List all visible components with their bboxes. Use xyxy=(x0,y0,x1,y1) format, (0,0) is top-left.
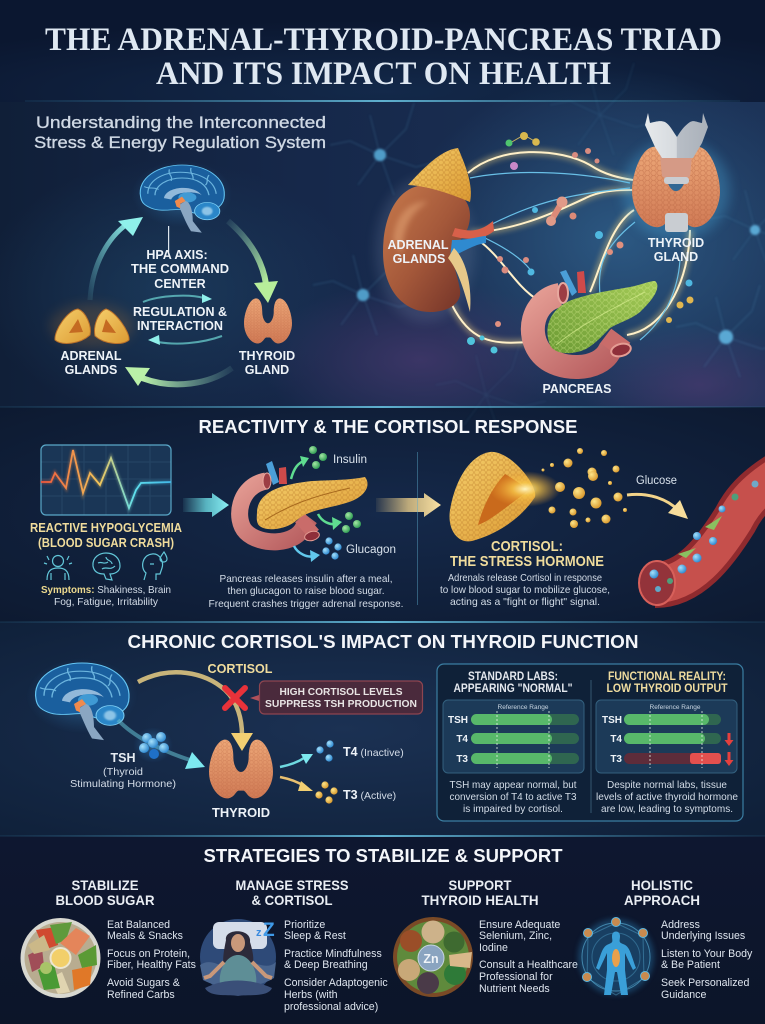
list: Seek Personalized xyxy=(661,977,749,989)
TSH molecule cluster xyxy=(133,727,173,763)
arrow: to pancreas xyxy=(183,493,229,517)
list: Meals & Snacks xyxy=(107,930,183,942)
label: thyroid gland: THYROID xyxy=(239,349,295,363)
list: Prioritize xyxy=(284,919,325,931)
label: thyroid gland: GLAND xyxy=(245,363,289,377)
note: standard labs xyxy=(450,780,577,815)
monitor chart xyxy=(41,445,171,515)
panel: standard labs: Reference Range xyxy=(498,704,549,711)
panel: pancreas hormones xyxy=(208,446,404,610)
icon: foggy brain xyxy=(93,553,120,580)
heading: functional reality xyxy=(606,671,728,695)
label: pancreas: PANCREAS xyxy=(542,382,612,396)
section 4 background xyxy=(0,836,765,1024)
list: Consider Adaptogenic xyxy=(284,977,388,989)
heading: chronic cortisol: CHRONIC CORTISOL'S IMPACT ON THYROID FUNCTION xyxy=(128,632,638,652)
cortisol arrow xyxy=(138,672,253,751)
heading: SUPPORT xyxy=(448,878,512,893)
diagram: cortisol suppression xyxy=(26,658,422,820)
subtitle: Understanding the Interconnected xyxy=(36,113,326,132)
title xyxy=(45,22,722,92)
panel: stabilize blood sugar xyxy=(20,878,196,1001)
small arrow top xyxy=(143,294,212,303)
heading: reactive hypoglycemia: REACTIVE HYPOGLYCEMIA xyxy=(30,521,182,535)
bar chart: functional reality xyxy=(602,711,734,768)
T3 molecules xyxy=(315,781,338,804)
pancreas xyxy=(533,270,657,367)
label: TSH: Stimulating Hormone) xyxy=(70,779,176,790)
heading xyxy=(624,878,700,908)
bar chart: standard labs: T3 xyxy=(456,754,468,765)
cortisol description xyxy=(440,573,610,608)
subtitle xyxy=(34,113,326,152)
list: Listen to Your Body xyxy=(661,948,753,960)
blood vessel xyxy=(639,468,765,605)
heading: standard labs: APPEARING "NORMAL" xyxy=(454,683,572,695)
panel: manage stress xyxy=(200,878,388,1013)
label: regulation and interaction: INTERACTION xyxy=(137,319,223,333)
section 2 background xyxy=(0,407,765,622)
pointer line xyxy=(168,226,169,252)
heading: standard labs: STANDARD LABS: xyxy=(468,671,558,683)
panel: reactive hypoglycemia xyxy=(30,445,182,608)
label: adrenal glands: GLANDS xyxy=(65,363,117,377)
label: thyroid: THYROID xyxy=(212,806,270,820)
list: Avoid Sugars & xyxy=(107,977,180,989)
list xyxy=(479,919,578,995)
lower green molecules xyxy=(318,512,361,533)
neuron network background xyxy=(313,63,765,435)
panel: functional reality: Reference Range xyxy=(650,704,701,711)
label: thyroid gland: THYROID xyxy=(648,236,704,250)
callout: suppress TSH: HIGH CORTISOL LEVELS xyxy=(280,686,402,698)
callout: suppress TSH: SUPPRESS TSH PRODUCTION xyxy=(265,698,417,710)
heading: THYROID HEALTH xyxy=(422,893,539,908)
list: & Deep Breathing xyxy=(284,959,368,971)
list: Address xyxy=(661,919,700,931)
label: adrenal glands: ADRENAL xyxy=(387,238,449,252)
list: Underlying Issues xyxy=(661,930,745,942)
list: Selenium, Zinc, xyxy=(479,930,552,942)
brain xyxy=(26,658,138,740)
label: TSH: TSH xyxy=(110,751,136,765)
list xyxy=(284,919,388,1013)
label: TSH: (Thyroid xyxy=(103,767,143,778)
small arrow bottom xyxy=(148,335,222,345)
icon: thyroid gland xyxy=(244,298,292,344)
heading xyxy=(56,878,155,908)
bar chart: standard labs: T4 xyxy=(456,734,468,745)
note: functional reality: levels of active thyroid hormone xyxy=(596,792,738,803)
label: thyroid gland: GLAND xyxy=(654,250,698,264)
list: Guidance xyxy=(661,989,706,1001)
arrow: adrenals to brain xyxy=(90,217,143,300)
label: T3: T3 (Active) xyxy=(343,788,396,802)
icon: tired head xyxy=(143,552,167,580)
arrow: to cortisol xyxy=(376,493,441,517)
list: Ensure Adequate xyxy=(479,919,560,931)
arrow: brain to thyroid xyxy=(228,221,278,303)
panel: holistic approach xyxy=(578,878,753,1001)
arrow: T3 xyxy=(280,777,313,791)
list: Fiber, Healthy Fats xyxy=(107,959,196,971)
list: Nutrient Needs xyxy=(479,983,550,995)
list xyxy=(107,919,196,1001)
pancreas description xyxy=(208,574,404,610)
label: insulin: Insulin xyxy=(333,454,367,466)
list: Professional for xyxy=(479,971,553,983)
heading: standard labs xyxy=(454,671,572,695)
pancreas description: then glucagon to raise blood sugar. xyxy=(228,586,384,597)
TSH arrow xyxy=(118,720,205,769)
list xyxy=(661,919,753,1001)
kidney xyxy=(375,178,494,322)
callout: suppress TSH xyxy=(250,681,422,714)
label: adrenal glands: ADRENAL xyxy=(60,349,122,363)
icon: meditating person: z xyxy=(256,927,262,939)
label: T4: T4 (Inactive) xyxy=(343,745,404,759)
symptoms text xyxy=(41,585,171,608)
label: HPA axis: CENTER xyxy=(154,277,206,291)
title band background xyxy=(0,0,765,102)
section 3 background xyxy=(0,622,765,836)
list: & Be Patient xyxy=(661,959,720,971)
heading: reactive hypoglycemia: (BLOOD SUGAR CRASH) xyxy=(38,536,174,550)
list: Focus on Protein, xyxy=(107,948,190,960)
heading: cortisol the stress hormone: CORTISOL: xyxy=(491,538,563,555)
heading: HOLISTIC xyxy=(631,878,693,893)
pancreas description: Frequent crashes trigger adrenal response. xyxy=(208,599,404,610)
triad illustration xyxy=(375,113,730,396)
heading: cortisol the stress hormone xyxy=(450,538,604,570)
thyroid xyxy=(209,740,273,798)
hormone molecules xyxy=(467,132,694,354)
adrenal burst illustration xyxy=(450,452,561,541)
heading: reactivity: REACTIVITY & THE CORTISOL RESPONSE xyxy=(198,417,578,437)
label: thyroid gland xyxy=(648,236,704,264)
icon: nutrient bowl: Zn xyxy=(423,952,439,966)
heading: & CORTISOL xyxy=(252,893,332,908)
panel: functional reality xyxy=(596,671,738,815)
brain: HPA axis xyxy=(132,161,232,233)
label: regulation and interaction xyxy=(133,305,227,333)
pancreas illustration xyxy=(240,461,368,542)
panel: lab comparison xyxy=(437,664,743,821)
label: regulation and interaction: REGULATION & xyxy=(133,305,227,319)
label: glucagon: Glucagon xyxy=(346,544,396,556)
label: glucose: Glucose xyxy=(636,475,677,487)
list: professional advice) xyxy=(284,1001,378,1013)
icon: balanced plate xyxy=(20,918,100,998)
panel: support thyroid xyxy=(393,878,578,997)
bar chart: standard labs xyxy=(448,711,579,768)
heading: cortisol the stress hormone: THE STRESS HORMONE xyxy=(450,553,604,570)
symptoms text: Symptoms: Shakiness, Brain xyxy=(41,585,171,596)
list: Refined Carbs xyxy=(107,989,175,1001)
note: standard labs: is impaired by cortisol. xyxy=(463,804,563,815)
heading xyxy=(236,878,348,908)
cortisol description: Adrenals release Cortisol in response xyxy=(448,573,602,584)
bar chart: standard labs: TSH xyxy=(448,715,468,726)
cortisol description: acting as a "fight or flight" signal. xyxy=(450,597,600,608)
note: functional reality xyxy=(596,780,738,815)
list: Eat Balanced xyxy=(107,919,170,931)
heading: BLOOD SUGAR xyxy=(56,893,155,908)
note: standard labs: conversion of T4 to active T3 xyxy=(450,792,577,803)
bar chart: functional reality: T3 xyxy=(610,754,622,765)
heading: reactive hypoglycemia xyxy=(30,521,182,550)
heading xyxy=(422,878,539,908)
icon: body energy figure xyxy=(578,918,654,995)
note: functional reality: Despite normal labs, tissue xyxy=(607,780,727,791)
icon: meditating person xyxy=(200,919,276,996)
label: adrenal glands xyxy=(60,349,122,377)
red X xyxy=(225,688,245,708)
note: functional reality: are low, leading to symptoms. xyxy=(601,804,733,815)
bar chart: functional reality: TSH xyxy=(602,715,622,726)
thyroid gland xyxy=(622,140,730,240)
cortisol description: to low blood sugar to mobilize glucose, xyxy=(440,585,610,596)
list: Herbs (with xyxy=(284,989,338,1001)
list: Practice Mindfulness xyxy=(284,948,382,960)
T4 molecules xyxy=(316,740,334,762)
list: Sleep & Rest xyxy=(284,930,346,942)
adrenal gland cap xyxy=(408,148,471,202)
glowing connections xyxy=(452,152,690,343)
title: AND ITS IMPACT ON HEALTH xyxy=(156,56,611,92)
arrow: thyroid to adrenals xyxy=(125,367,232,386)
arrow: glucose to vessel xyxy=(627,494,688,519)
label: HPA axis: THE COMMAND xyxy=(131,262,229,276)
label: adrenal glands: GLANDS xyxy=(393,252,445,266)
section 1 background xyxy=(0,70,765,445)
thyroid cartilage xyxy=(645,113,708,158)
bar chart: functional reality: T4 xyxy=(610,734,622,745)
label: HPA axis xyxy=(131,248,229,291)
list: Iodine xyxy=(479,942,508,954)
note: standard labs: TSH may appear normal, but xyxy=(450,780,577,791)
label: adrenal glands xyxy=(387,238,449,266)
HPA axis cycle diagram xyxy=(50,161,295,386)
icon: meditating person: Z xyxy=(263,920,275,941)
title: THE ADRENAL-THYROID-PANCREAS TRIAD xyxy=(45,22,722,58)
glucose particles xyxy=(542,448,627,528)
heading: MANAGE STRESS xyxy=(236,878,348,893)
arrow: T4 xyxy=(280,754,313,767)
label: cortisol: CORTISOL xyxy=(208,661,273,676)
heading: functional reality: FUNCTIONAL REALITY: xyxy=(608,671,726,683)
list: Consult a Healthcare xyxy=(479,959,578,971)
panel: cortisol xyxy=(440,448,765,608)
panel: standard labs xyxy=(443,671,584,815)
icon: shaky person xyxy=(44,556,72,580)
icon: nutrient bowl xyxy=(393,917,473,997)
symptoms text: Fog, Fatigue, Irritability xyxy=(54,597,159,608)
label: HPA axis: HPA AXIS: xyxy=(146,248,208,262)
icon: adrenal glands xyxy=(50,304,134,348)
insulin molecules xyxy=(291,446,327,479)
label: TSH xyxy=(70,751,176,790)
heading: APPROACH xyxy=(624,893,700,908)
heading: STABILIZE xyxy=(72,878,138,893)
heading: strategies: STRATEGIES TO STABILIZE & SUPPORT xyxy=(204,846,562,866)
pancreas description: Pancreas releases insulin after a meal, xyxy=(220,574,392,585)
heading: functional reality: LOW THYROID OUTPUT xyxy=(606,683,728,695)
glucagon molecules xyxy=(294,537,342,562)
subtitle: Stress & Energy Regulation System xyxy=(34,133,326,152)
label: thyroid gland xyxy=(239,349,295,377)
